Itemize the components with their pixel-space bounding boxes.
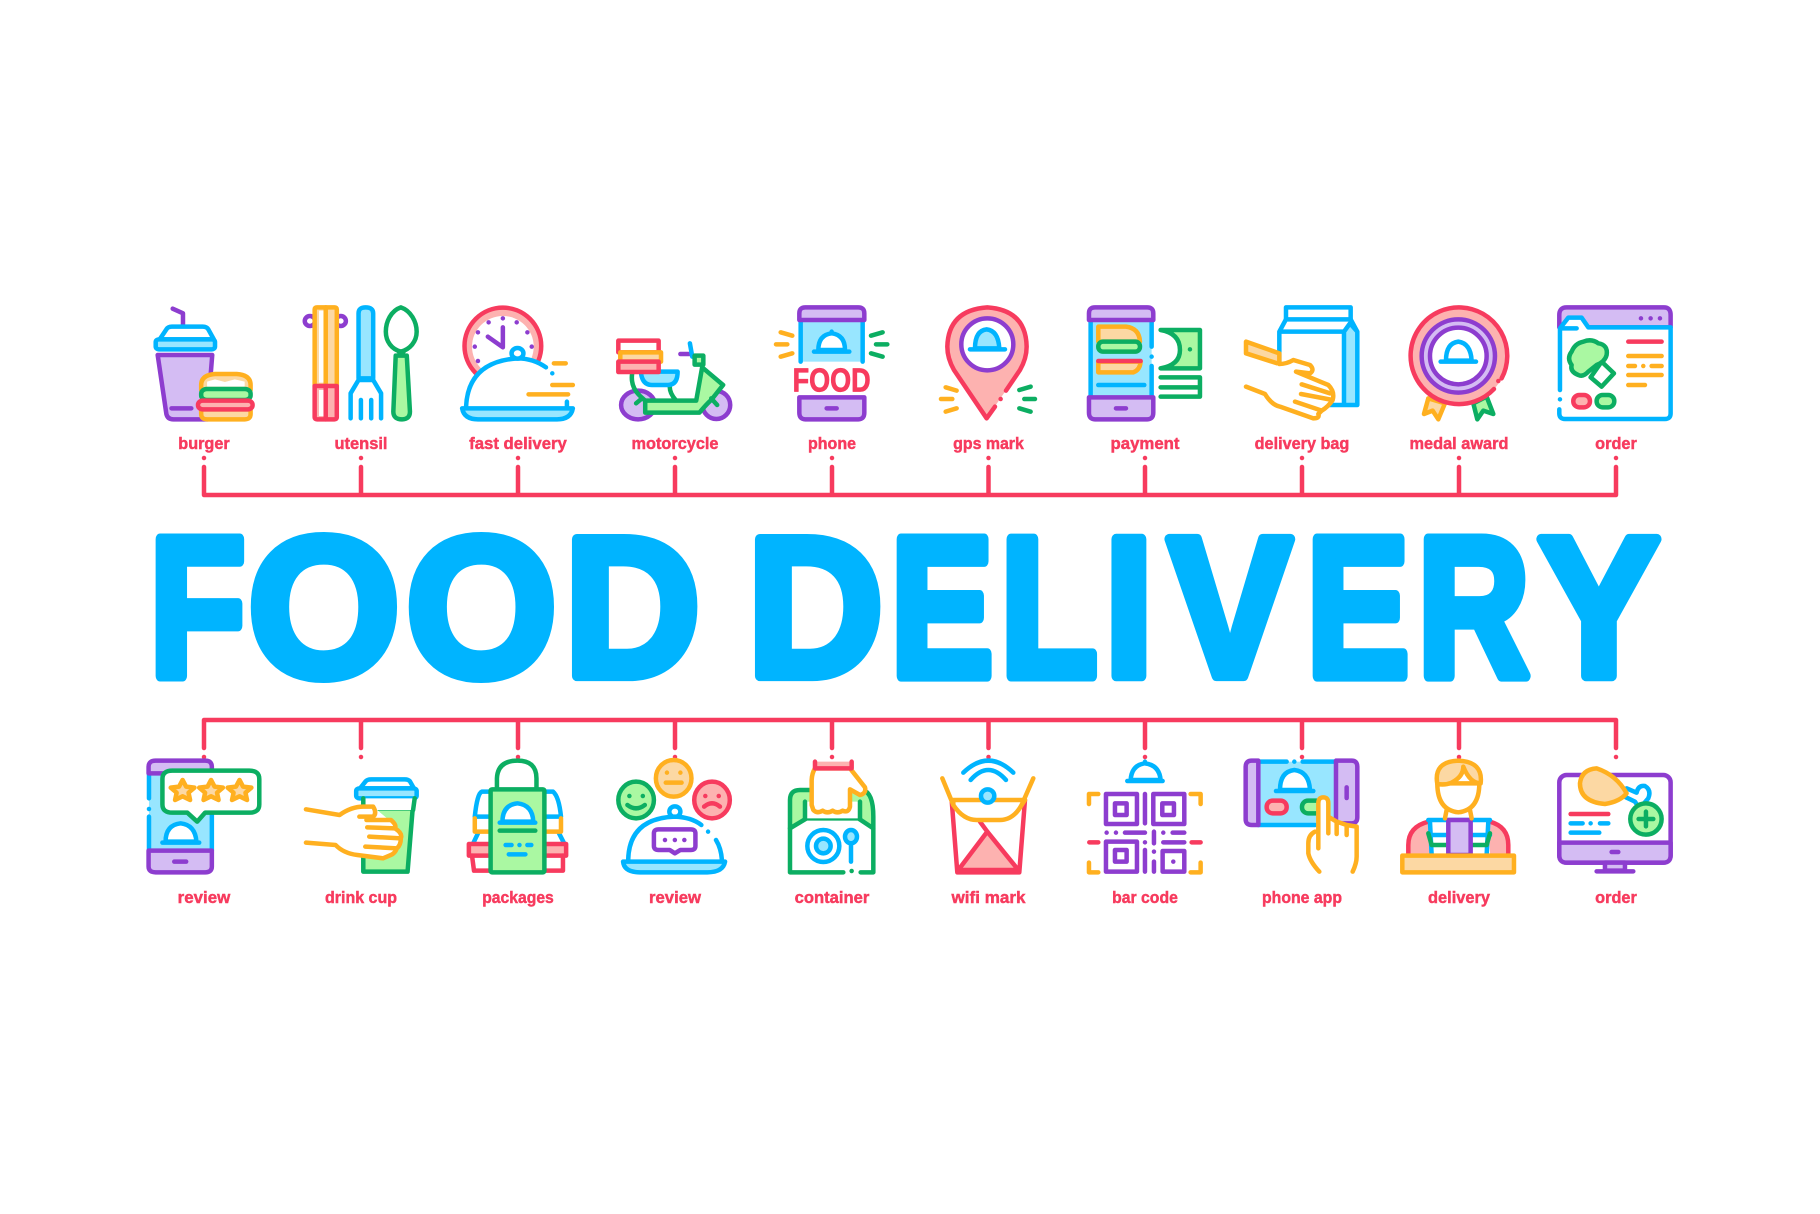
label: gps mark: gps mark: [953, 435, 1025, 453]
label: payment: payment: [1110, 435, 1180, 453]
label: packages: packages: [482, 889, 554, 907]
label: utensil: utensil: [334, 435, 388, 453]
icon: burger and drink: [156, 309, 253, 419]
label: order: order: [1595, 889, 1637, 907]
label: motorcycle: motorcycle: [632, 435, 718, 453]
icon: review with smiley faces: [618, 760, 730, 872]
icon: delivery person: [1402, 761, 1514, 872]
icon: review phone with stars: [149, 761, 259, 872]
label: medal award: medal award: [1410, 435, 1508, 453]
label: review: review: [178, 889, 230, 907]
label: wifi mark: wifi mark: [950, 889, 1026, 907]
title: F: [150, 497, 246, 719]
title: E: [1307, 496, 1409, 719]
icon: container: [790, 762, 873, 872]
icon: bar code: [1089, 762, 1201, 872]
icon: fast delivery: [462, 308, 573, 419]
label: fast delivery: fast delivery: [469, 435, 568, 453]
icon: drink cup: [306, 779, 417, 872]
title: R: [1418, 496, 1530, 718]
label: phone: phone: [808, 435, 856, 453]
title: O: [248, 496, 400, 718]
title: O: [406, 496, 557, 718]
label: review: review: [649, 889, 701, 907]
connector: bottom timeline: [204, 720, 1616, 757]
label: phone app: phone app: [1262, 889, 1342, 907]
icon: gps mark: [941, 307, 1035, 418]
icon: delivery bag: [1246, 307, 1357, 418]
label: container: container: [795, 889, 870, 907]
icon: computer order: [1559, 768, 1671, 871]
title: Y: [1538, 497, 1660, 719]
title: L: [1000, 497, 1098, 719]
label: bar code: bar code: [1112, 889, 1178, 907]
title: V: [1168, 496, 1292, 718]
label: delivery bag: delivery bag: [1255, 435, 1349, 453]
label: burger: burger: [178, 435, 230, 453]
label: delivery: delivery: [1428, 889, 1491, 907]
label: order: order: [1595, 435, 1637, 453]
icon: medal award: [1410, 307, 1507, 419]
title: D: [564, 496, 700, 719]
icon: motorcycle: [618, 341, 730, 419]
label: drink cup: drink cup: [325, 889, 397, 907]
title: I: [1104, 495, 1154, 718]
title: D: [747, 496, 883, 719]
icon: utensil: [305, 307, 417, 419]
icon: wifi mark: [942, 761, 1033, 872]
icon: phone app: [1246, 761, 1357, 872]
icon: phone with food sign: [776, 307, 887, 419]
icon: phone with food sign: FOOD: [793, 362, 871, 399]
title: E: [891, 496, 993, 719]
connector: top timeline: [204, 458, 1616, 495]
icon: order window: [1559, 307, 1671, 419]
title: [150, 495, 1660, 719]
icon: payment: [1089, 307, 1200, 419]
icon: packages: [469, 761, 566, 872]
